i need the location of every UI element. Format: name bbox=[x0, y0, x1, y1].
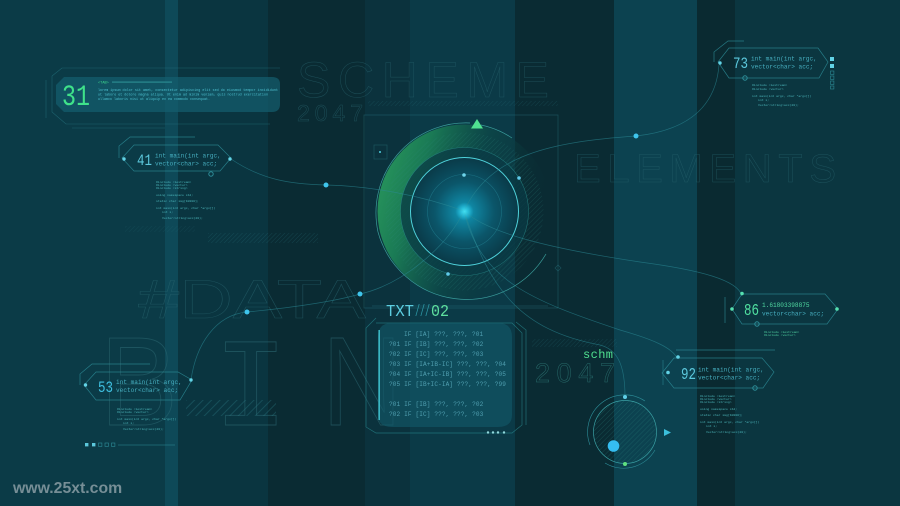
frame marker dot bbox=[379, 151, 381, 153]
code snippet: #include <string> bbox=[700, 400, 732, 404]
heading: TXT ///02: /// bbox=[415, 303, 430, 322]
code snippet: #include <vector> bbox=[764, 333, 796, 337]
panel: 86 code tag: vector<char> acc; bbox=[762, 310, 824, 318]
code snippet: int main(int argc, char *argv[]) bbox=[752, 94, 812, 98]
panel: 73 code tag: vector<char> acc; bbox=[751, 64, 813, 70]
code snippet bbox=[764, 330, 799, 337]
watermark: www.25xt.com bbox=[12, 480, 122, 497]
ghost label: 2047 right: 2047 bbox=[535, 358, 615, 388]
panel: 31 text banner bbox=[46, 68, 280, 128]
ghost letter: B: B bbox=[100, 311, 178, 452]
code snippet: Vector<string>acc(20); bbox=[123, 427, 164, 431]
code snippet: int i; bbox=[123, 421, 134, 425]
panel: 86 code tag: 86 bbox=[744, 302, 759, 321]
code snippet: Vector<string>acc(20); bbox=[706, 430, 747, 434]
code snippet: static char img[10000]; bbox=[700, 413, 743, 417]
code snippet: int i; bbox=[162, 210, 173, 214]
ghost heading: #DATA: #DATA bbox=[138, 268, 366, 330]
heading: TXT ///02: TXT bbox=[386, 303, 414, 322]
code rows: IF [IA] ???, ???, ?01 bbox=[404, 331, 484, 338]
panel: 73 code tag: 73 bbox=[733, 55, 748, 73]
central radar dial bbox=[376, 119, 552, 299]
code snippet: #include <vector> bbox=[700, 397, 732, 401]
code snippet: Vector<string>acc(20); bbox=[758, 103, 799, 107]
code rows: ?04 IF [IA+IC-IB] ???, ???, ?05 bbox=[389, 371, 506, 378]
panel: 73 code tag bbox=[714, 41, 834, 107]
code snippet bbox=[700, 394, 760, 434]
code rows: ?02 IF [IC] ???, ???, ?03 bbox=[389, 411, 484, 418]
panel: 41 code tag bbox=[119, 137, 232, 220]
panel: 53 code tag: 53 bbox=[98, 379, 113, 397]
code snippet: #include <string> bbox=[156, 186, 188, 190]
panel: 31 text banner: <TAB> bbox=[98, 80, 109, 86]
code snippet: int main(int argc, char *argv[]) bbox=[700, 420, 760, 424]
panel: 53 code tag: int main(int argc, bbox=[116, 379, 182, 386]
panel: 41 code tag: int main(int argc, bbox=[155, 152, 221, 160]
pagination dots bbox=[85, 443, 175, 446]
panel: 86 code tag bbox=[725, 292, 839, 337]
panel: 73 code tag: int main(int argc, bbox=[751, 56, 817, 62]
code snippet: int i; bbox=[706, 424, 717, 428]
code snippet: int main(int argc, char *argv[]) bbox=[117, 417, 177, 421]
ghost heading: SCHEME: SCHEME bbox=[297, 52, 549, 108]
code rows: ?01 IF [IB] ???, ???, ?02 bbox=[389, 341, 484, 348]
connector nodes bbox=[244, 134, 638, 314]
panel: 31 text banner: ullamco laboris nisi ut aliquip ex ea commodo consequat. bbox=[98, 97, 210, 102]
ghost letter: N: N bbox=[322, 311, 402, 452]
label: schm: schm bbox=[583, 348, 613, 362]
heading: TXT ///02 bbox=[386, 303, 449, 322]
status squares bbox=[830, 57, 834, 89]
code snippet: #include <iostream> bbox=[156, 180, 191, 184]
panel: 41 code tag: 41 bbox=[137, 152, 152, 170]
code snippet: int main(int argc, char *argv[]) bbox=[156, 206, 216, 210]
code rows: ?05 IF [IB+IC-IA] ???, ???, ?99 bbox=[389, 381, 506, 388]
code snippet: using namespace std; bbox=[700, 407, 737, 411]
code snippet: #include <vector> bbox=[752, 87, 784, 91]
code snippet: static char img[10000]; bbox=[156, 199, 199, 203]
decorative hatch bands bbox=[125, 101, 617, 416]
code snippet: #include <iostream> bbox=[764, 330, 799, 334]
panel: 53 code tag: vector<char> acc; bbox=[116, 387, 178, 394]
panel: 53 code tag bbox=[80, 364, 193, 431]
code snippet: #include <iostream> bbox=[117, 407, 152, 411]
code snippet: #include <vector> bbox=[117, 410, 149, 414]
central frame bbox=[364, 115, 561, 308]
icon: play triangle bbox=[664, 429, 671, 436]
icon: green triangle bbox=[471, 119, 483, 128]
pager dots bbox=[487, 431, 505, 434]
number 31: 31 bbox=[62, 81, 90, 115]
code snippet: int i; bbox=[758, 98, 769, 102]
panel: 92 code tag: vector<char> acc; bbox=[698, 374, 760, 382]
code snippet: #include <iostream> bbox=[700, 394, 735, 398]
heading: TXT ///02: 02 bbox=[431, 303, 449, 322]
panel: 86 code tag: 1.61803398875 bbox=[762, 302, 810, 309]
code rows: ?01 IF [IB] ???, ???, ?02 bbox=[389, 401, 484, 408]
panel: 31 text banner: ut labore et dolore magna aliqua. Ut enim ad minim veniam, quis nostrud exercitation bbox=[98, 92, 268, 98]
dial centre glow bbox=[456, 202, 474, 220]
code snippet: #include <vector> bbox=[156, 183, 188, 187]
code rows: ?02 IF [IC] ???, ???, ?03 bbox=[389, 351, 484, 358]
code snippet: #include <iostream> bbox=[752, 83, 787, 87]
ghost label: 2047 top: 2047 bbox=[297, 100, 363, 126]
code snippet: Vector<string>acc(20); bbox=[162, 216, 203, 220]
code snippet: using namespace std; bbox=[156, 193, 193, 197]
panel: 41 code tag: vector<char> acc; bbox=[155, 160, 217, 168]
code snippet bbox=[117, 407, 177, 431]
code rows bbox=[389, 331, 506, 418]
panel: 92 code tag bbox=[662, 350, 775, 434]
panel: 92 code tag: 92 bbox=[681, 366, 696, 385]
panel: 31 text banner: lorem ipsum dolor sit amet, consectetur adipiscing elit sed do eiusmod tempor incididunt bbox=[98, 88, 278, 93]
connector lines bbox=[191, 65, 742, 397]
accent bar bbox=[378, 330, 380, 420]
ghost letter: I: I bbox=[213, 320, 289, 463]
code snippet bbox=[156, 180, 216, 220]
code snippet bbox=[752, 83, 812, 107]
panel: 92 code tag: int main(int argc, bbox=[698, 366, 764, 374]
small gauge dial bbox=[588, 395, 671, 468]
code rows: ?03 IF [IA+IB-IC] ???, ???, ?04 bbox=[389, 361, 506, 368]
panel: code listing bbox=[366, 318, 526, 434]
ghost heading: ELEMENTS: ELEMENTS bbox=[574, 147, 836, 191]
